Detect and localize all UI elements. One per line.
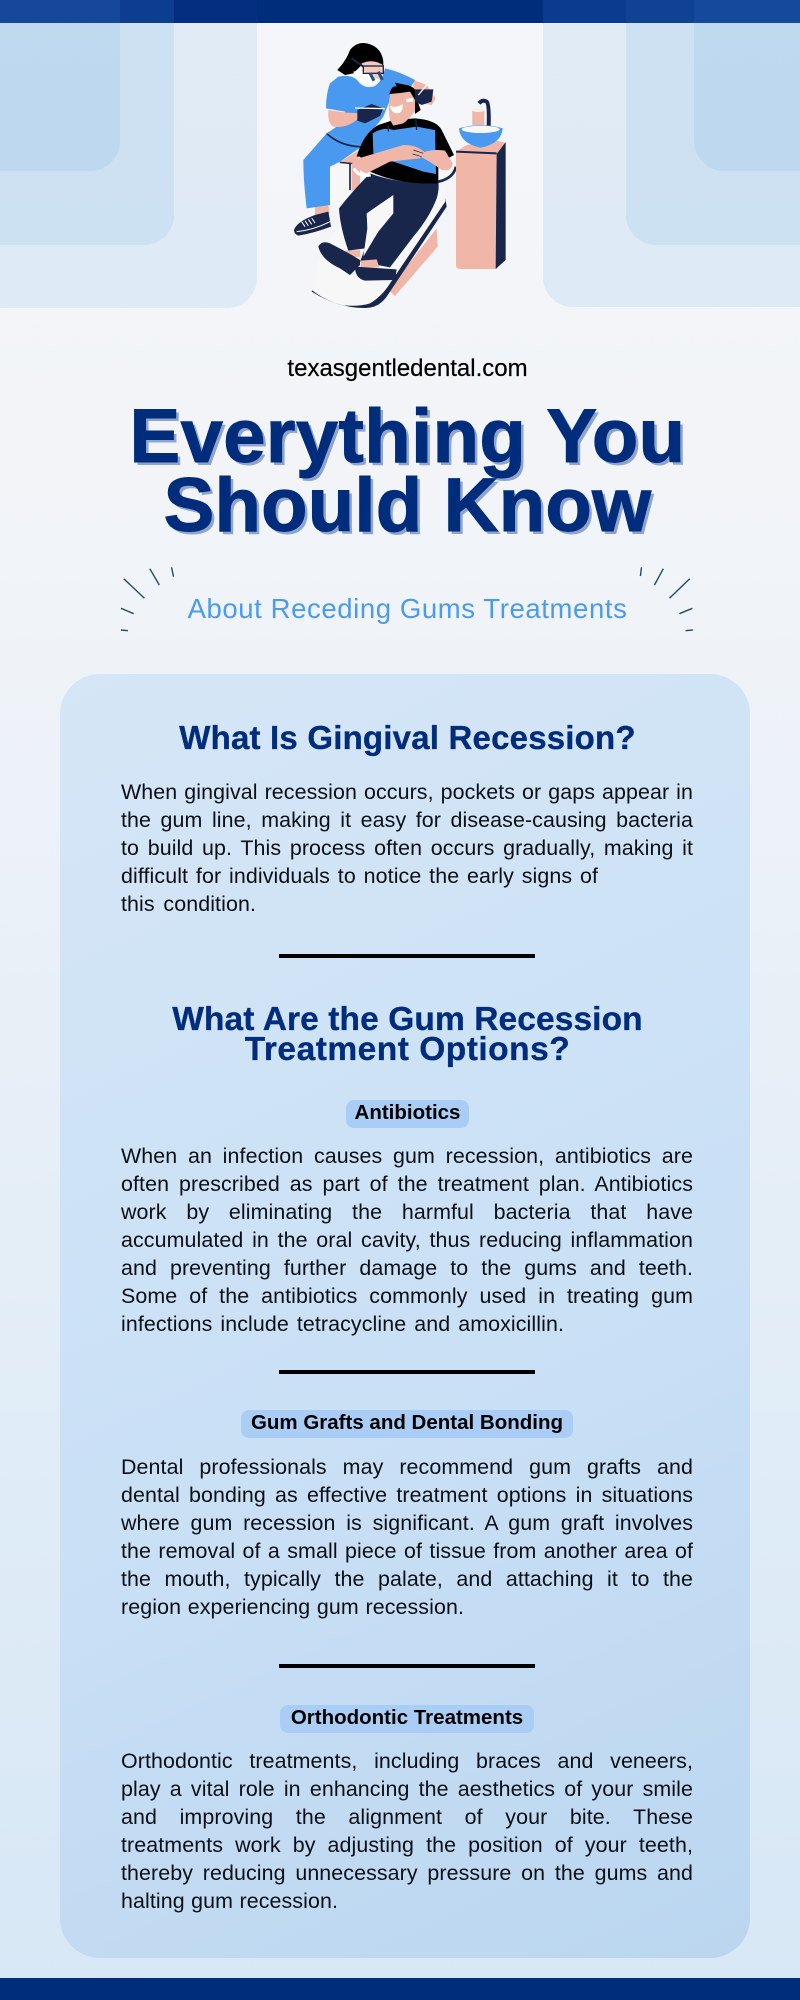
dentist upper body: [326, 68, 436, 146]
subtitle: About Receding Gums Treatments: [188, 593, 627, 624]
text block: gum grafts: the mouth, typically the palate, and attaching it to the: [121, 1567, 693, 1591]
text block: gingival recession: the gum line, making it easy for disease-causing bacteria: [121, 808, 693, 832]
text block: gum grafts: Dental professionals may recommend gum grafts and: [121, 1455, 693, 1479]
text block: gum grafts: dental bonding as effective treatment options in situations: [121, 1483, 693, 1507]
dentist head: [337, 43, 383, 86]
text block: gingival recession: When gingival recession occurs, pockets or gaps appear in: [121, 780, 693, 804]
label: gum grafts and dental bonding: Gum Grafts and Dental Bonding: [251, 1411, 563, 1434]
heading: treatment options: [172, 1001, 643, 1068]
text block: antibiotics: When an infection causes gum recession, antibiotics are: [121, 1144, 693, 1168]
illustration: dentist treating patient in chair: [294, 43, 506, 308]
decorative sparks right: [640, 567, 693, 632]
title: [129, 394, 686, 548]
decorative sparks left: [120, 567, 174, 632]
sink cabinet: [456, 141, 506, 269]
sink basin, faucet and cup: [459, 101, 503, 148]
text block: antibiotics: Some of the antibiotics commonly used in treating gum: [121, 1284, 693, 1308]
heading: what is gingival recession: What Is Gingival Recession?: [179, 719, 636, 756]
stool and chair back: [330, 151, 438, 296]
text block: gum grafts: [121, 1455, 693, 1619]
patient body: [339, 118, 456, 267]
background panels: top right: [543, 23, 800, 307]
title: Everything You: [129, 394, 686, 478]
text block: orthodontic treatments: treatments work by adjusting the position of your teeth,: [121, 1833, 693, 1857]
heading: treatment options: Treatment Options?: [245, 1031, 570, 1068]
text block: antibiotics: work by eliminating the harmful bacteria that have: [121, 1200, 693, 1224]
text block: gum grafts: the removal of a small piece of tissue from another area of: [121, 1539, 693, 1563]
label: orthodontic treatments: Orthodontic Treatments: [291, 1706, 523, 1729]
text block: gingival recession: [121, 780, 693, 916]
text block: orthodontic treatments: thereby reducing unnecessary pressure on the gums and: [121, 1861, 693, 1885]
text block: gum grafts: where gum recession is significant. A gum graft involves: [121, 1511, 693, 1535]
title: Should Know: [164, 462, 651, 548]
top bar: [0, 0, 800, 23]
text block: orthodontic treatments: Orthodontic treatments, including braces and veneers,: [121, 1749, 693, 1773]
text block: antibiotics: often prescribed as part of the treatment plan. Antibiotics: [121, 1172, 693, 1196]
text block: orthodontic treatments: [121, 1749, 693, 1913]
text block: antibiotics: and preventing further damage to the gums and teeth.: [121, 1256, 693, 1280]
website url: texasgentledental.com: [287, 355, 528, 382]
label: antibiotics: Antibiotics: [355, 1101, 460, 1124]
text block: orthodontic treatments: halting gum recession.: [121, 1889, 338, 1913]
text block: orthodontic treatments: and improving the alignment of your bite. These: [121, 1805, 693, 1829]
text block: gingival recession: to build up. This process often occurs gradually, making it: [121, 836, 693, 860]
text block: antibiotics: accumulated in the oral cavity, thus reducing inflammation: [121, 1228, 693, 1252]
panel: main content: [60, 674, 750, 1958]
text block: gingival recession: this condition.: [121, 892, 256, 916]
text block: antibiotics: [121, 1144, 693, 1336]
text block: gum grafts: region experiencing gum recession.: [121, 1595, 464, 1619]
text block: antibiotics: infections include tetracycline and amoxicillin.: [121, 1312, 564, 1336]
background panels: top left: [0, 23, 257, 308]
heading: treatment options: What Are the Gum Recession: [172, 1001, 643, 1038]
dental chair: [312, 187, 447, 308]
text block: orthodontic treatments: play a vital role in enhancing the aesthetics of your smile: [121, 1777, 693, 1801]
dentist legs: [294, 133, 362, 236]
bottom bar: [0, 1978, 800, 2000]
text block: gingival recession: difficult for individuals to notice the early signs of: [121, 864, 598, 888]
patient feet: [318, 242, 397, 281]
patient head: [388, 83, 433, 132]
